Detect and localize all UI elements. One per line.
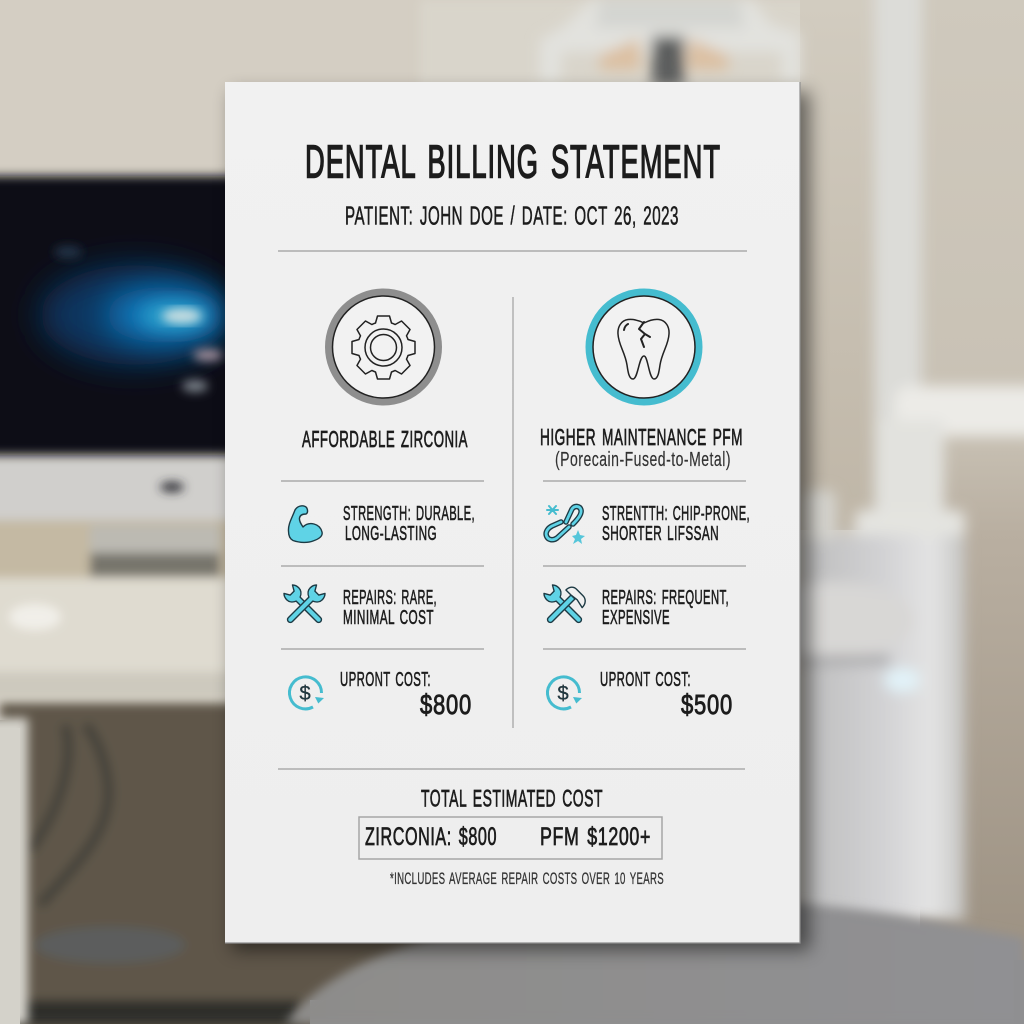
blurred desk and monitor (0, 176, 500, 1024)
title: DENTAL BILLING STATEMENT (305, 136, 721, 188)
paper drop shadow (232, 92, 810, 950)
icon: dollar cycle, zirconia (290, 677, 324, 709)
icon: cracked tooth in teal ring (589, 292, 699, 402)
repairs text, zirconia: MINIMAL COST (343, 606, 434, 629)
right column heading: HIGHER MAINTENANCE PFM (540, 424, 743, 450)
icon: dollar cycle, zirconia: $ (299, 683, 311, 705)
patient and date line: PATIENT: JOHN DOE / DATE: OCT 26, 2023 (345, 202, 679, 230)
icon: broken chain link (546, 506, 585, 544)
upfront cost, PFM: UPRONT COST: (600, 668, 691, 691)
icon: gear in grey ring (328, 292, 438, 402)
upfront cost, zirconia: $800 (420, 689, 472, 720)
strength text, zirconia (343, 502, 475, 545)
total estimated cost heading: TOTAL ESTIMATED COST (421, 786, 603, 812)
repairs text, zirconia: REPAIRS: RARE, (343, 586, 437, 609)
icon: crossed wrenches (282, 583, 327, 628)
total cost box: ZIRCONIA: $800 (365, 823, 497, 851)
upfront cost, PFM: $500 (681, 689, 733, 720)
blurred dental chair (755, 0, 1024, 920)
upfront cost, zirconia (340, 668, 472, 720)
strength text, PFM: STRENTTH: CHIP-PRONE, (602, 502, 750, 525)
blurred round stool (285, 900, 1024, 1024)
strength text, zirconia: STRENGTH: DURABLE, (343, 502, 475, 525)
billing statement paper (225, 82, 800, 943)
strength text, PFM (602, 502, 750, 545)
icon: dollar cycle, PFM (548, 677, 582, 709)
left column heading: AFFORDABLE ZIRCONIA (302, 426, 468, 452)
strength text, PFM: SHORTER LIFSSAN (602, 522, 719, 545)
total cost box: PFM $1200+ (540, 823, 651, 851)
right column heading (540, 424, 743, 471)
repairs text, zirconia (343, 586, 437, 629)
total cost box (359, 817, 662, 859)
blurred dental lamp (540, 0, 800, 86)
icon: flexed muscle (288, 506, 322, 542)
upfront cost, PFM (600, 668, 733, 720)
footnote: *INCLUDES AVERAGE REPAIR COSTS OVER 10 YEARS (390, 869, 664, 888)
strength text, zirconia: LONG-LASTING (345, 522, 437, 545)
right column heading: (Porecain-Fused-to-Metal) (555, 449, 731, 471)
repairs text, PFM (602, 586, 729, 629)
upfront cost, zirconia: UPRONT COST: (340, 668, 431, 691)
repairs text, PFM: EXPENSIVE (602, 606, 670, 629)
icon: dollar cycle, PFM: $ (557, 683, 569, 705)
icon: wrench and hammer (542, 583, 589, 628)
repairs text, PFM: REPAIRS: FREQUENT, (602, 586, 729, 609)
